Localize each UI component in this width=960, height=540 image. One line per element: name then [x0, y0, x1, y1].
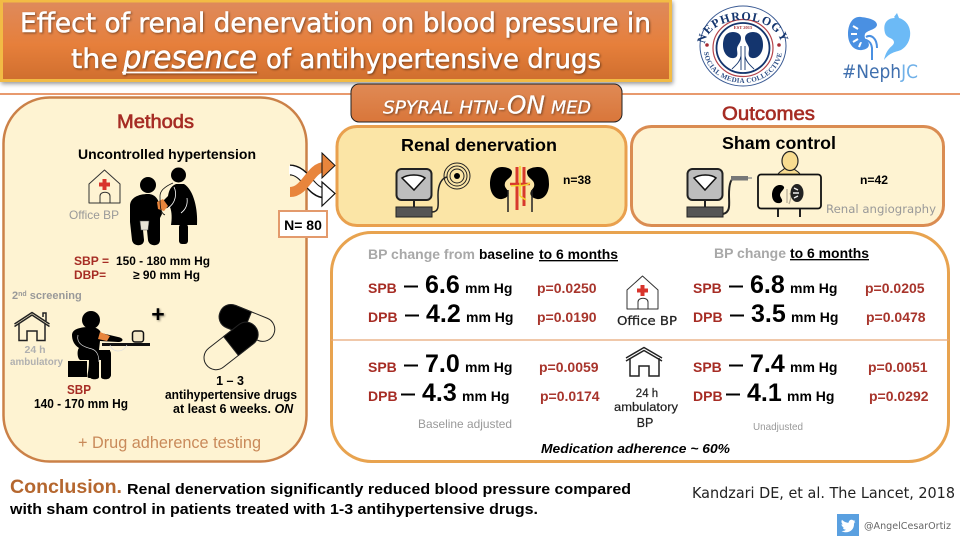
conclusion: Renal denervation significantly reduced blood pressure compared	[127, 482, 631, 498]
text: drugs criteria	[165, 374, 297, 416]
results: denervation office sbp: mm Hg	[465, 280, 512, 296]
results: denervation office dbp: DPB	[368, 309, 398, 325]
heading: denervation bp change: to 6 months	[539, 247, 618, 262]
title banner	[2, 1, 670, 80]
text: unadjusted: Unadjusted	[753, 421, 803, 433]
results: sham office dbp: mm Hg	[791, 309, 838, 325]
text: office bp: Office BP	[69, 208, 119, 222]
text: office bp: Office BP	[617, 314, 677, 328]
results: sham office dbp: 3.5	[751, 300, 786, 328]
results: denervation ambulatory dbp	[368, 379, 600, 407]
heading: sham bp change: to 6 months	[790, 246, 869, 261]
results: denervation ambulatory sbp: 7.0	[425, 350, 460, 378]
results: denervation ambulatory sbp	[368, 350, 599, 378]
text: drugs criteria: at least 6 weeks. ON	[173, 402, 294, 416]
banner: trial name	[351, 84, 622, 122]
icon: pills	[199, 301, 278, 375]
icon: clinic	[89, 170, 120, 203]
heading: outcomes: Outcomes	[722, 103, 815, 125]
results: sham ambulatory dbp: 4.1	[747, 379, 782, 407]
title text: the	[71, 44, 118, 75]
results: sham ambulatory dbp: DPB	[693, 388, 723, 404]
text: office bp criteria	[74, 254, 210, 282]
icon: patient on angiography screen	[758, 152, 821, 217]
icon: doctor measuring patient blood pressure	[130, 168, 197, 245]
results: denervation ambulatory sbp: mm Hg	[465, 359, 512, 375]
logo: NephJC	[842, 13, 918, 83]
icon: clinic	[627, 276, 658, 309]
text: n=38: n=38	[563, 175, 592, 187]
conclusion: Conclusion.	[10, 477, 122, 498]
panel: sham control	[632, 126, 944, 226]
results: sham ambulatory sbp	[693, 350, 928, 378]
text: 24 h ambulatory bp: ambulatory	[614, 402, 678, 414]
icon: seated patient with ambulatory monitor	[68, 311, 150, 379]
text: n=42: n=42	[860, 175, 888, 187]
icon: twitter	[837, 514, 859, 536]
results: sham office sbp	[693, 271, 925, 299]
results: denervation office sbp: SPB	[368, 280, 397, 296]
title text: presence	[122, 40, 257, 76]
title text: of antihypertensive drugs	[266, 44, 601, 75]
text: office bp criteria: 150 - 180 mm Hg	[116, 254, 210, 268]
banner: trial name: MED	[551, 98, 591, 118]
text: 24 h ambulatory bp	[614, 388, 678, 430]
text: 24 h ambulatory: 24 h	[24, 344, 46, 356]
text: screening sbp: 140 - 170 mm Hg	[34, 397, 128, 411]
results: sham ambulatory dbp: mm Hg	[787, 388, 834, 404]
results: denervation office dbp: 4.2	[426, 300, 461, 328]
text: handle: @AngelCesarOrtiz	[864, 521, 951, 532]
text: drugs criteria: 1 – 3	[216, 374, 244, 388]
text: 2nd screening: 2	[12, 290, 18, 302]
results: denervation office dbp: p=0.0190	[537, 309, 597, 325]
results: denervation office dbp: mm Hg	[466, 309, 513, 325]
heading: denervation bp change: BP change from	[368, 247, 475, 262]
results: sham ambulatory sbp: SPB	[693, 359, 722, 375]
panel: renal denervation	[337, 126, 626, 226]
results: denervation ambulatory dbp: p=0.0174	[540, 388, 600, 404]
results: denervation office sbp: 6.6	[425, 271, 460, 299]
results: denervation ambulatory sbp: p=0.0059	[539, 359, 599, 375]
results: sham office dbp	[693, 300, 926, 328]
conclusion: with sham control in patients treated with 1-3 antihypertensive drugs.	[9, 502, 538, 518]
heading: sham bp change	[714, 246, 869, 261]
title text: Effect of renal denervation on blood pressure in	[20, 8, 651, 39]
text: office bp criteria: SBP =	[74, 254, 109, 268]
callout: n = 80: N= 80	[284, 217, 322, 233]
results: denervation ambulatory dbp: 4.3	[422, 379, 457, 407]
conclusion	[9, 477, 631, 518]
icon: kidneys with renal nerves	[490, 166, 549, 212]
heading: sham bp change: BP change	[714, 246, 787, 261]
results: sham office sbp: mm Hg	[790, 280, 837, 296]
results: denervation office sbp: p=0.0250	[537, 280, 597, 296]
banner: trial name: SPYRAL HTN-	[383, 98, 505, 118]
results: sham office sbp: SPB	[693, 280, 722, 296]
heading: methods: Methods	[117, 112, 194, 133]
text: 24 h ambulatory bp: 24 h	[636, 388, 658, 400]
heading: denervation bp change	[368, 247, 618, 262]
results: sham ambulatory sbp: 7.4	[750, 350, 785, 378]
icon: randomisation arrows	[289, 153, 335, 206]
results: denervation office dbp	[368, 300, 597, 328]
text: renal denervation heading: Renal denervation	[401, 135, 557, 155]
heading: denervation bp change: baseline	[479, 247, 534, 262]
text: drugs criteria: antihypertensive drugs	[165, 388, 297, 402]
results: sham office dbp: DPB	[693, 309, 723, 325]
icon: angiography console	[687, 169, 752, 217]
divider line	[0, 93, 960, 95]
logo: NephJC: #NephJC	[842, 61, 918, 83]
logo: nephrology social media collective: SOCIAL MEDIA COLLECTIVE	[704, 52, 782, 83]
results: sham ambulatory dbp	[693, 379, 929, 407]
text: renal angiography: Renal angiography	[826, 202, 936, 216]
banner: trial name: ON	[507, 90, 545, 120]
icon: home	[14, 312, 50, 340]
text: 24 h ambulatory: ambulatory	[10, 356, 63, 368]
callout: n = 80	[279, 211, 327, 237]
text: 24 h ambulatory	[10, 344, 63, 368]
panel: methods	[4, 98, 306, 462]
results: sham office sbp: 6.8	[750, 271, 785, 299]
text: 24 h ambulatory bp: BP	[637, 416, 653, 430]
credit: twitter handle	[837, 514, 951, 536]
text: drug adherence testing: + Drug adherence testing	[78, 434, 261, 452]
icon: plus: +	[151, 301, 165, 327]
results: sham ambulatory dbp: p=0.0292	[869, 388, 929, 404]
logo: nephrology social media collective: EST 2015	[734, 25, 753, 30]
results: denervation ambulatory dbp: DPB	[368, 388, 398, 404]
text: screening sbp	[34, 383, 128, 411]
text: uncontrolled hypertension: Uncontrolled hypertension	[78, 146, 256, 162]
logo: nephrology social media collective: NEPHROLOGY	[697, 12, 788, 44]
panel: results	[331, 232, 949, 462]
results: sham ambulatory sbp: p=0.0051	[868, 359, 928, 375]
logo: nephrology social media collective	[697, 6, 788, 86]
text: 2nd screening: screening	[27, 290, 82, 302]
icon: home	[626, 348, 662, 376]
icon: denervation device	[396, 163, 470, 217]
text: 2nd screening: nd	[18, 291, 27, 298]
title text	[20, 8, 651, 76]
text: office bp criteria: DBP=	[74, 268, 106, 282]
text: sham control heading: Sham control	[722, 133, 836, 153]
results: denervation ambulatory sbp: SPB	[368, 359, 397, 375]
results: sham office sbp: p=0.0205	[865, 280, 925, 296]
results: denervation office sbp	[368, 271, 597, 299]
text: medication adherence: Medication adherence ~ 60%	[541, 441, 730, 456]
text: office bp criteria: ≥ 90 mm Hg	[133, 268, 200, 282]
text: screening sbp: SBP	[67, 383, 91, 397]
text: baseline adjusted: Baseline adjusted	[418, 417, 512, 431]
results: denervation ambulatory dbp: mm Hg	[462, 388, 509, 404]
results: sham office dbp: p=0.0478	[866, 309, 926, 325]
results: sham ambulatory sbp: mm Hg	[790, 359, 837, 375]
